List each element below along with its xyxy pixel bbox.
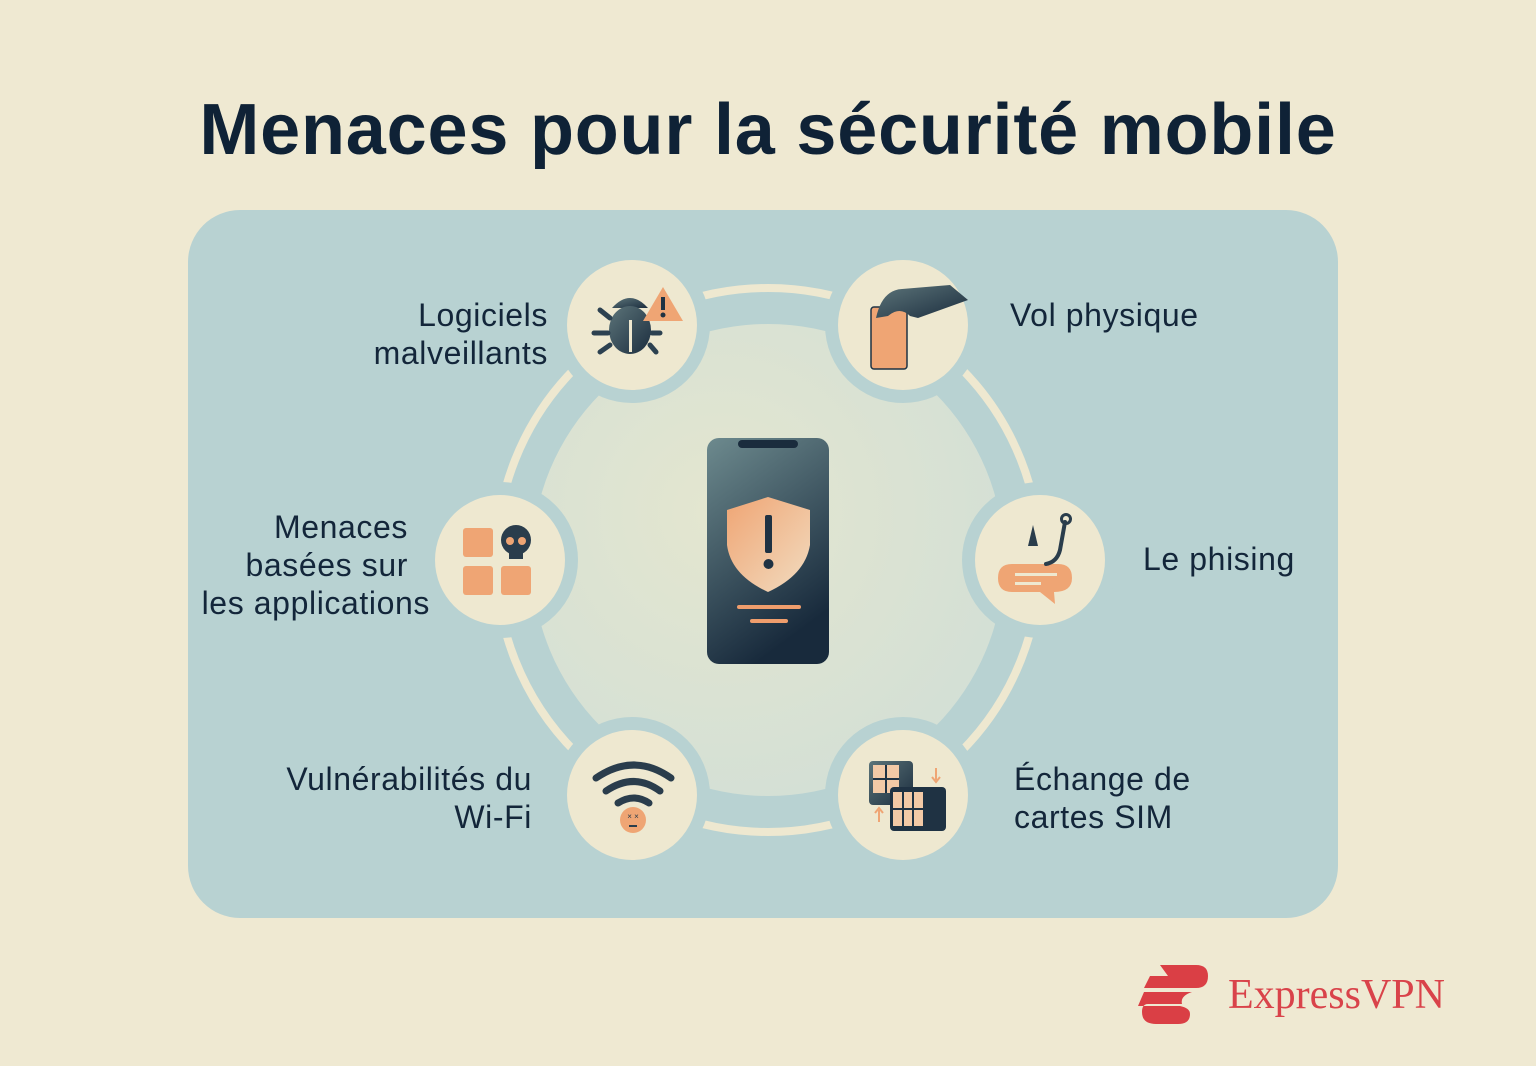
logo: ExpressVPN <box>1138 965 1445 1024</box>
label: wifi: Wi-Fi <box>454 799 532 835</box>
label: phishing: Le phising <box>1143 541 1295 577</box>
label: logiciels malveillants <box>374 297 548 371</box>
label: wifi: Vulnérabilités du <box>286 761 532 797</box>
logo: ExpressVPN: ExpressVPN <box>1228 972 1445 1018</box>
title: Menaces pour la sécurité mobile <box>199 90 1337 170</box>
label: vol physique: Vol physique <box>1010 297 1199 333</box>
label: SIM <box>1014 761 1191 835</box>
inner circle <box>532 324 1004 796</box>
label: menaces apps: Menaces <box>274 509 408 545</box>
label: menaces apps <box>245 509 408 583</box>
panel: diagram <box>188 210 1338 918</box>
label: SIM: Échange de <box>1014 761 1191 797</box>
track ring <box>496 288 1040 832</box>
label: wifi <box>286 761 532 835</box>
icon: phishing message <box>998 514 1072 604</box>
icon: phone with shield <box>707 438 829 664</box>
icon: bug with warning <box>594 287 683 354</box>
label: logiciels malveillants: Logiciels <box>418 297 548 333</box>
icon: wifi broken: × × <box>627 812 639 821</box>
node circles <box>435 260 1105 860</box>
icon: apps with skull <box>463 525 531 595</box>
halos <box>422 247 1118 873</box>
icon: SIM cards <box>869 761 946 831</box>
label: menaces apps: basées sur <box>245 547 408 583</box>
icon: hand taking phone <box>871 285 968 369</box>
label: SIM: cartes SIM <box>1014 799 1173 835</box>
icon: wifi broken <box>596 765 671 833</box>
label: les applications: les applications <box>202 585 430 621</box>
label: logiciels malveillants: malveillants <box>374 335 548 371</box>
